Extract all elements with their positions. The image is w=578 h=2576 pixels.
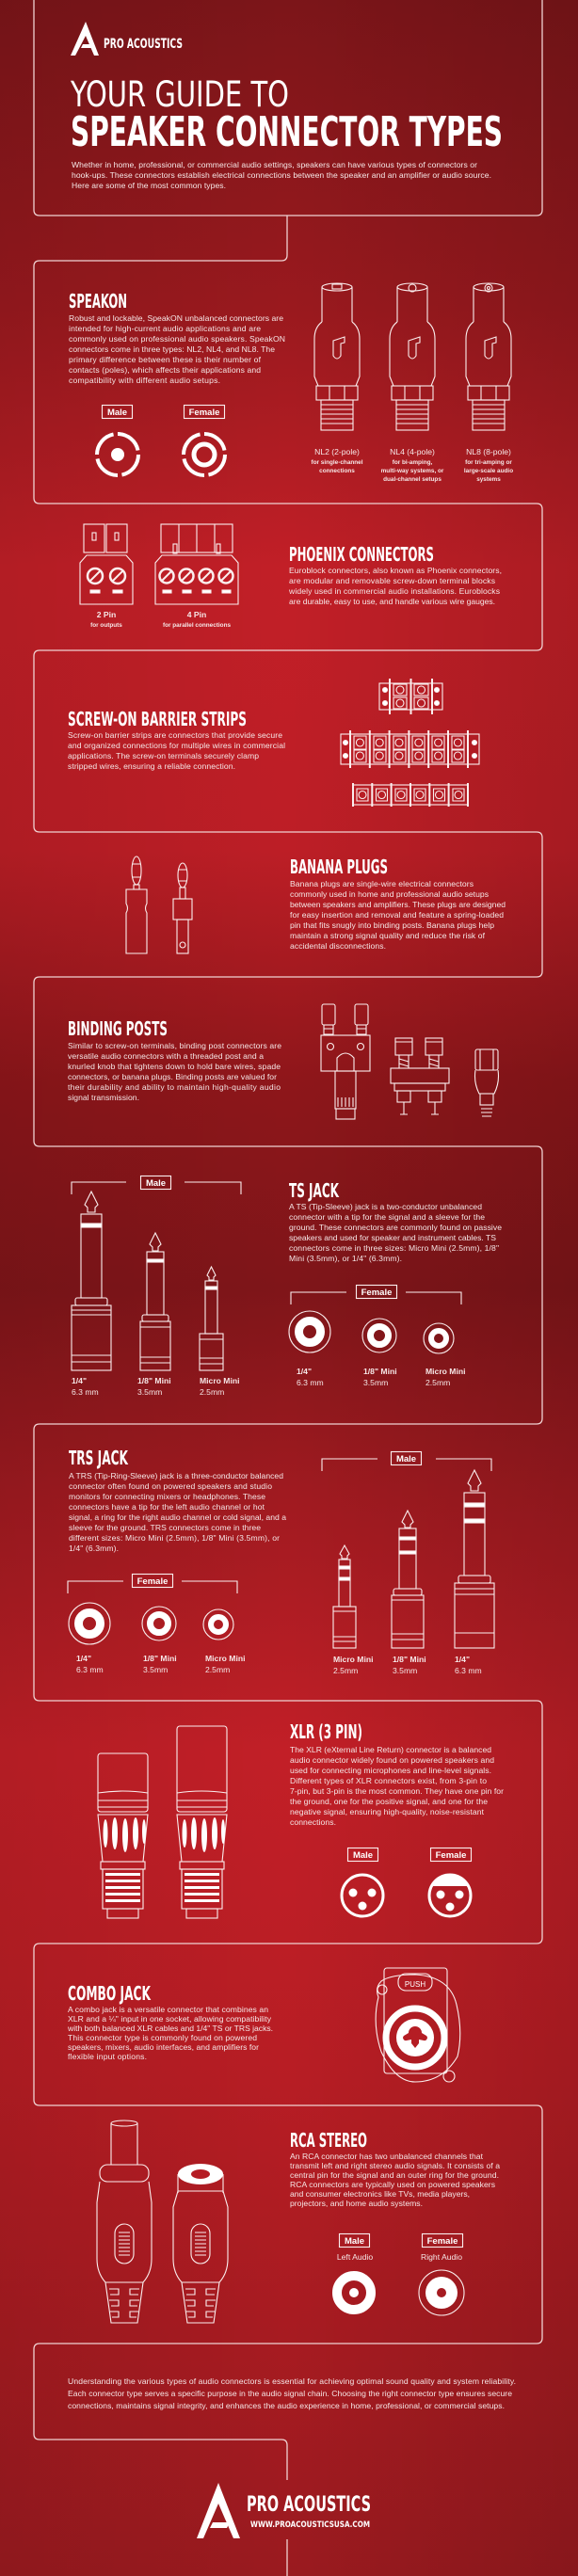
bracket: TRS male (322, 1451, 491, 1471)
text: banana: Banana plugs are single-wire electrical connectors (290, 879, 474, 888)
text: banana: pin that fits snugly into binding posts. Banana plugs help (290, 920, 494, 930)
text: speakon: primary difference between these is their number of (69, 355, 262, 364)
icon: NL8 (466, 283, 511, 430)
heading: binding: BINDING POSTS (68, 1017, 168, 1040)
heading: combo: COMBO JACK (68, 1982, 152, 2005)
heading: barrier: SCREW-ON BARRIER STRIPS (68, 708, 247, 730)
text: XLR: Different types of XLR connectors exist, from 3-pin to (290, 1776, 487, 1785)
icon: RCA plug male (97, 2120, 152, 2323)
icon: speakon male: Male (107, 408, 127, 418)
panel: TRS jack (68, 1447, 494, 1675)
text: XLR: The XLR (eXternal Line Return) connector is a balanced (290, 1745, 491, 1754)
text: speakon: intended for high-current audio applications and are (69, 324, 261, 333)
labels: speakon types: systems (476, 476, 501, 483)
intro text: Here are some of the most common types. (72, 181, 226, 190)
icon: strip 6x1 (353, 783, 468, 807)
text: TRS: connectors have a tip for the left audio channel or hot (69, 1502, 265, 1512)
text: TRS: A TRS (Tip-Ring-Sleeve) jack is a three-conductor balanced (69, 1471, 283, 1480)
text: TS: A TS (Tip-Sleeve) jack is a two-conductor unbalanced (289, 1202, 482, 1211)
panel: phoenix (80, 524, 502, 629)
header logo: PRO ACOUSTICS (104, 37, 183, 52)
labels: speakon types: large-scale audio (464, 468, 513, 474)
bracket: TRS female (68, 1574, 237, 1593)
icon: XLR female socket (429, 1848, 471, 1916)
icon: TRS 1/4 plug (455, 1470, 494, 1648)
heading: XLR: XLR (3 PIN) (290, 1720, 362, 1743)
icon: banana plug 1 (126, 856, 147, 953)
text: TRS (69, 1471, 286, 1553)
labels: TS male: 6.3 mm (72, 1387, 99, 1397)
text: barrier: and organized connections for multiple wires in commercial (68, 741, 285, 750)
panel: banana plugs (126, 856, 506, 953)
labels: TS male: Micro Mini (200, 1376, 239, 1385)
icon: strip 2x2 (379, 679, 442, 714)
labels: speakon types (311, 447, 513, 483)
text: banana: accidental disconnections. (290, 941, 386, 951)
conclusion text: Understanding the various types of audio connectors is essential for achieving optimal sound quality and system reliability. (68, 2376, 516, 2386)
text: TRS: different sizes: Micro Mini (2.5mm), 1/8" Mini (3.5mm), or (69, 1533, 280, 1543)
icon: XLR plug male (177, 1726, 227, 1918)
text: TS: Mini (3.5mm), or 1/4" (6.3mm). (289, 1254, 402, 1263)
labels: TS male: 2.5mm (200, 1387, 224, 1397)
labels: TRS male: 1/8" Mini (393, 1655, 426, 1664)
heading: RCA: RCA STEREO (290, 2129, 367, 2152)
labels: TS male: 1/8" Mini (137, 1376, 171, 1385)
text: XLR: 7-pin, but 3-pin is the most common. They have one pin for (290, 1786, 504, 1796)
text: TRS: connector often found on powered speakers and studio (69, 1481, 272, 1491)
icon: RCA male (337, 2234, 373, 2310)
heading: TRS: TRS JACK (69, 1447, 129, 1469)
labels: TRS male: 6.3 mm (455, 1666, 482, 1675)
icon: 4 pin (155, 524, 238, 629)
icons: TS female sockets (289, 1311, 454, 1353)
panel: binding posts (68, 1004, 499, 1119)
labels: speakon types: dual-channel setups (383, 476, 442, 483)
labels: TS female: 2.5mm (425, 1378, 450, 1387)
icon: 2 pin: for outputs (90, 622, 122, 629)
text: binding: their durability and ability to maintain high-quality audio (68, 1082, 281, 1092)
text: speakon: connectors come in three types: NL2, NL4, and NL8. The (69, 344, 275, 354)
text: speakon: compatibility with different audio setups. (69, 376, 220, 385)
text: XLR (290, 1745, 504, 1827)
labels: TRS female: 1/8" Mini (143, 1654, 177, 1663)
text: TS (289, 1202, 502, 1263)
labels: speakon types: for tri-amping or (465, 459, 512, 466)
icon: RCA female: Right Audio (421, 2252, 462, 2262)
bracket: female: Female (361, 1288, 392, 1298)
labels: TRS female: 2.5mm (205, 1665, 230, 1674)
icon: combo jack (376, 1968, 460, 2082)
icons: TRS female sockets (69, 1603, 233, 1644)
labels: TRS female: 1/4" (76, 1654, 91, 1663)
text: phoenix: are durable, easy to use, and handle various wire gauges. (289, 597, 495, 606)
icon: RCA female (419, 2234, 464, 2315)
panel: RCA stereo (97, 2120, 500, 2323)
text: binding: versatile audio connectors with a threaded post and a (68, 1051, 264, 1061)
text: barrier: stripped wires, ensuring a reliable connection. (68, 761, 235, 771)
text: binding: signal transmission. (68, 1093, 139, 1102)
icon: RCA male: Male (345, 2236, 364, 2247)
text: combo: XLR and a ¼" input in one socket, allowing compatibility (68, 2014, 272, 2024)
bracket: male (72, 1176, 241, 1194)
labels: speakon types: multi-way systems, or (381, 468, 444, 474)
bracket: TRS female: Female (137, 1576, 168, 1587)
text: RCA: central pin for the signal and an outer ring for the ground. (290, 2170, 499, 2180)
panel: barrier strips (68, 679, 479, 807)
text: TRS: sleeve for the ground. TRS connectors come in three (69, 1523, 261, 1532)
text: banana: maintain a strong signal quality and reduce the risk of (290, 931, 486, 940)
icon: NL4 (390, 283, 435, 430)
text: TRS: 1/4" (6.3mm). (69, 1544, 119, 1553)
panel: combo jack (67, 1968, 460, 2082)
labels: TRS male: 3.5mm (393, 1666, 417, 1675)
labels: speakon types: NL4 (4-pole) (390, 447, 435, 456)
text: combo: A combo jack is a versatile connector that combines an (68, 2005, 268, 2014)
header logo (71, 22, 183, 56)
text: binding: knurled knob that tightens down to hold bare wires, spade (68, 1062, 281, 1071)
icon: 2 pin (80, 524, 133, 629)
footer logo (197, 2483, 371, 2538)
heading: banana: BANANA PLUGS (290, 856, 388, 878)
panel: TS jack (72, 1176, 502, 1397)
text: binding (68, 1041, 281, 1102)
labels: TS female: Micro Mini (425, 1367, 465, 1376)
conclusion text (68, 2376, 516, 2410)
text: XLR: used for connecting microphones and line-level signals. (290, 1766, 491, 1775)
text: TS: connector with a tip for the signal and a sleeve for the (289, 1212, 485, 1222)
icon: TS micro plug (200, 1267, 223, 1370)
labels: TS male: 1/4" (72, 1376, 87, 1385)
labels: TS male (72, 1376, 239, 1397)
text: combo (67, 2005, 273, 2061)
text: combo: flexible input options. (68, 2052, 147, 2061)
text: banana: commonly used in home and professional audio setups (290, 889, 489, 899)
labels: TRS female (76, 1654, 245, 1674)
icon: 4 pin: 4 Pin (187, 610, 206, 619)
heading: TS: TS JACK (289, 1179, 340, 1202)
text: speakon (69, 313, 285, 385)
icon: XLR male socket: Male (353, 1850, 373, 1861)
bracket: male: Male (146, 1178, 166, 1189)
labels: TS female: 1/8" Mini (363, 1367, 397, 1376)
text: TRS: monitors for connecting mixers or headphones. These (69, 1492, 265, 1501)
text: speakon: contacts (poles), which affects their applications and (69, 365, 261, 375)
icon: TRS micro plug (333, 1545, 356, 1648)
labels: speakon types: for single-channel (311, 459, 363, 466)
text: banana: between speakers and amplifiers. These plugs are designed (290, 900, 506, 909)
text: banana (290, 879, 506, 951)
icon: RCA female: Female (427, 2236, 458, 2247)
labels: TRS female: 3.5mm (143, 1665, 168, 1674)
text: barrier: applications. The screw-on terminals securely clamp (68, 751, 259, 760)
icon: RCA plug female (173, 2164, 228, 2323)
text: binding: connectors, or banana plugs. Binding posts are valued for (68, 1072, 277, 1081)
title (70, 74, 503, 156)
labels: TS female: 6.3 mm (297, 1378, 324, 1387)
text: RCA: and consumer electronics like TVs, media players, (290, 2189, 470, 2199)
labels: speakon types: connections (319, 468, 355, 474)
title: YOUR GUIDE TO (70, 74, 289, 115)
icon: TRS 1/8 plug (392, 1511, 424, 1648)
text: phoenix: widely used in commercial audio installations. Euroblocks (288, 586, 500, 596)
icon: XLR female socket: Female (436, 1850, 466, 1861)
labels: TRS male: 1/4" (455, 1655, 470, 1664)
bracket: TRS male: Male (396, 1454, 416, 1464)
labels: TRS male: Micro Mini (333, 1655, 373, 1664)
icon: binding posts (321, 1004, 499, 1119)
text: RCA: RCA connectors are typically used on powered speakers (290, 2180, 495, 2189)
text: phoenix: are modular and removable screw-down terminal blocks (289, 576, 495, 585)
text: speakon: Robust and lockable, SpeakON unbalanced connectors are (69, 313, 283, 323)
intro text (72, 160, 491, 190)
labels: speakon types: for bi-amping, (393, 459, 433, 466)
icon: 4 pin: for parallel connections (163, 622, 231, 629)
text: combo: with both balanced XLR cables and 1/4" TS or TRS jacks. (67, 2024, 273, 2033)
footer logo: WWW.PROACOUSTICSUSA.COM (250, 2520, 370, 2530)
text: phoenix (288, 566, 502, 606)
labels: speakon types: NL2 (2-pole) (314, 447, 360, 456)
icon: strip 6x2 (341, 730, 479, 768)
labels: TRS male: 2.5mm (333, 1666, 358, 1675)
icon: banana plug 2 (173, 863, 192, 953)
text: combo: This connector type is commonly found on powered (68, 2033, 257, 2042)
text: binding: Similar to screw-on terminals, binding post connectors are (68, 1041, 281, 1050)
text: XLR: connections. (290, 1817, 336, 1827)
footer logo: PRO ACOUSTICS (247, 2493, 371, 2517)
icon: combo jack: PUSH (405, 1980, 425, 1989)
text: TS: ground. These connectors are commonly found on passive (289, 1223, 502, 1232)
text: TS: speakers and used for speaker and instrument cables. TS (289, 1233, 496, 1242)
intro text: Whether in home, professional, or commercial audio settings, speakers can have various types of connectors or (72, 160, 477, 169)
text: speakon: commonly used on professional audio speakers. SpeakON (69, 334, 285, 344)
labels: TRS female: 6.3 mm (76, 1665, 104, 1674)
text: RCA: projectors, and home audio systems. (290, 2199, 423, 2208)
text: RCA (290, 2152, 500, 2208)
icon: XLR plug female (98, 1753, 148, 1918)
text: XLR: audio connector widely found on powered speakers and (290, 1755, 494, 1765)
text: RCA: transmit left and right stereo audio signals. It consists of a (290, 2161, 500, 2170)
labels: TS female (297, 1367, 465, 1387)
panel: speakon (69, 283, 513, 483)
labels: speakon types: NL8 (8-pole) (466, 447, 511, 456)
panel: XLR (98, 1720, 504, 1918)
icon: XLR male socket (342, 1848, 383, 1916)
icon: NL2 (314, 283, 360, 430)
icon: speakon female (184, 405, 225, 475)
labels: TS male: 3.5mm (137, 1387, 162, 1397)
labels: TS female: 1/4" (297, 1367, 312, 1376)
text: phoenix: Euroblock connectors, also known as Phoenix connectors, (289, 566, 502, 575)
text: banana: for easy insertion and removal and feature a spring-loaded (290, 910, 504, 920)
labels: TRS female: Micro Mini (205, 1654, 245, 1663)
icon: 2 pin: 2 Pin (97, 610, 116, 619)
icon: TS 1/4 plug (72, 1192, 111, 1370)
icon: speakon female: Female (189, 408, 219, 418)
text: TS: connectors come in three sizes: Micro Mini (2.5mm), 1/8" (289, 1243, 499, 1253)
icon: TS 1/8 plug (140, 1233, 170, 1370)
labels: TRS male (333, 1655, 482, 1675)
bracket: female (291, 1286, 461, 1304)
text: barrier: Screw-on barrier strips are connectors that provide secure (68, 730, 282, 740)
text: RCA: An RCA connector has two unbalanced channels that (290, 2152, 484, 2161)
conclusion text: connections, maintains signal integrity, and enhances the audio experience in home, professional, or commercial setups. (68, 2401, 505, 2410)
text: barrier (68, 730, 285, 771)
text: combo: speakers, mixers, audio interfaces, and amplifiers for (68, 2042, 259, 2052)
text: XLR: negative signal, ensuring high-quality, noise-resistant (290, 1807, 485, 1816)
text: XLR: the ground, one for the positive signal, and one for the (290, 1797, 488, 1806)
intro text: hook-ups. These connectors establish electrical connections between the speaker and an amplifier or audio source. (72, 170, 491, 180)
labels: TS female: 3.5mm (363, 1378, 388, 1387)
conclusion text: Each connector type serves a specific purpose in the audio signal chain. Choosing the right connector type ensures secure (68, 2389, 512, 2398)
text: TRS: signal, a ring for the right audio channel or cold signal, and a (69, 1512, 286, 1522)
heading: speakon: SPEAKON (69, 290, 127, 312)
icon: speakon male (97, 405, 138, 475)
icon: RCA male: Left Audio (337, 2252, 373, 2262)
heading: phoenix: PHOENIX CONNECTORS (289, 543, 434, 566)
